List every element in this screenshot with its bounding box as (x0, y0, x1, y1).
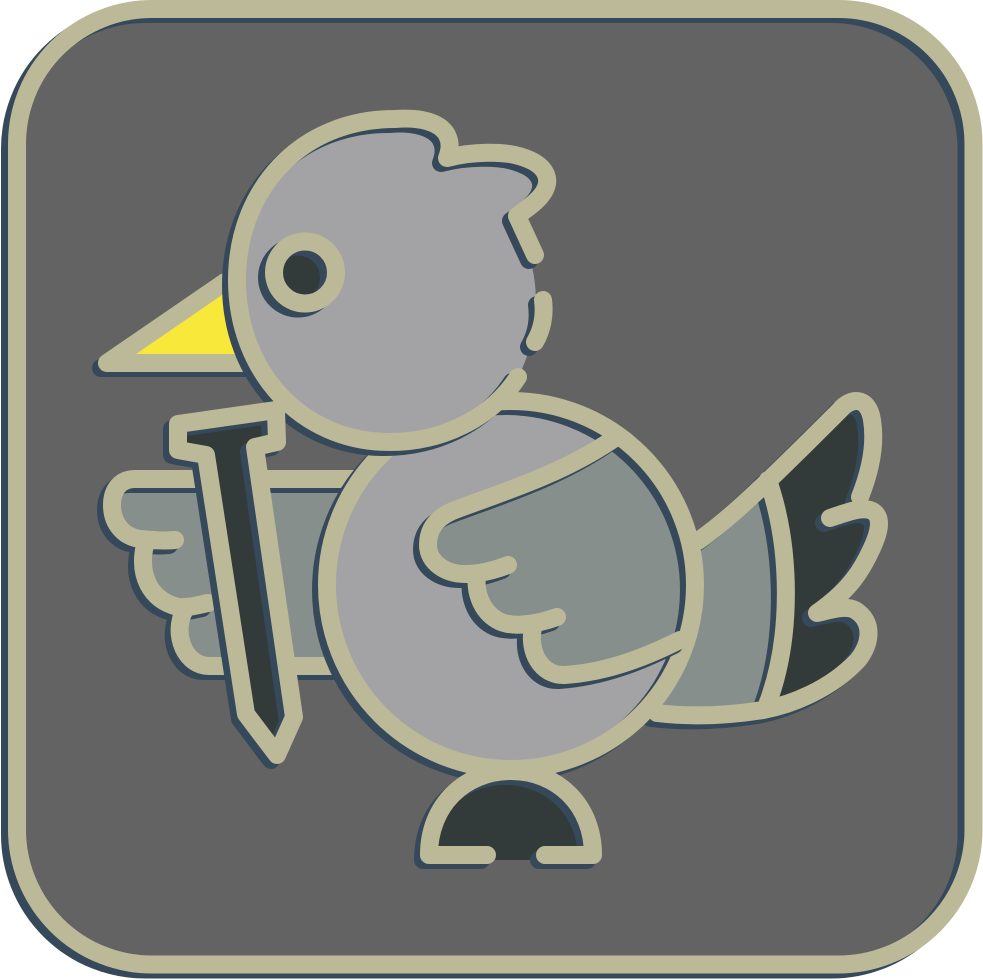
foot (423, 771, 593, 860)
tail (651, 401, 879, 720)
head (231, 119, 547, 447)
icon: nail (172, 410, 294, 760)
wing fill (428, 440, 689, 675)
left wing (106, 479, 360, 671)
body (321, 401, 695, 774)
eye (267, 242, 336, 308)
beak (101, 282, 250, 368)
right wing outline (422, 440, 680, 680)
